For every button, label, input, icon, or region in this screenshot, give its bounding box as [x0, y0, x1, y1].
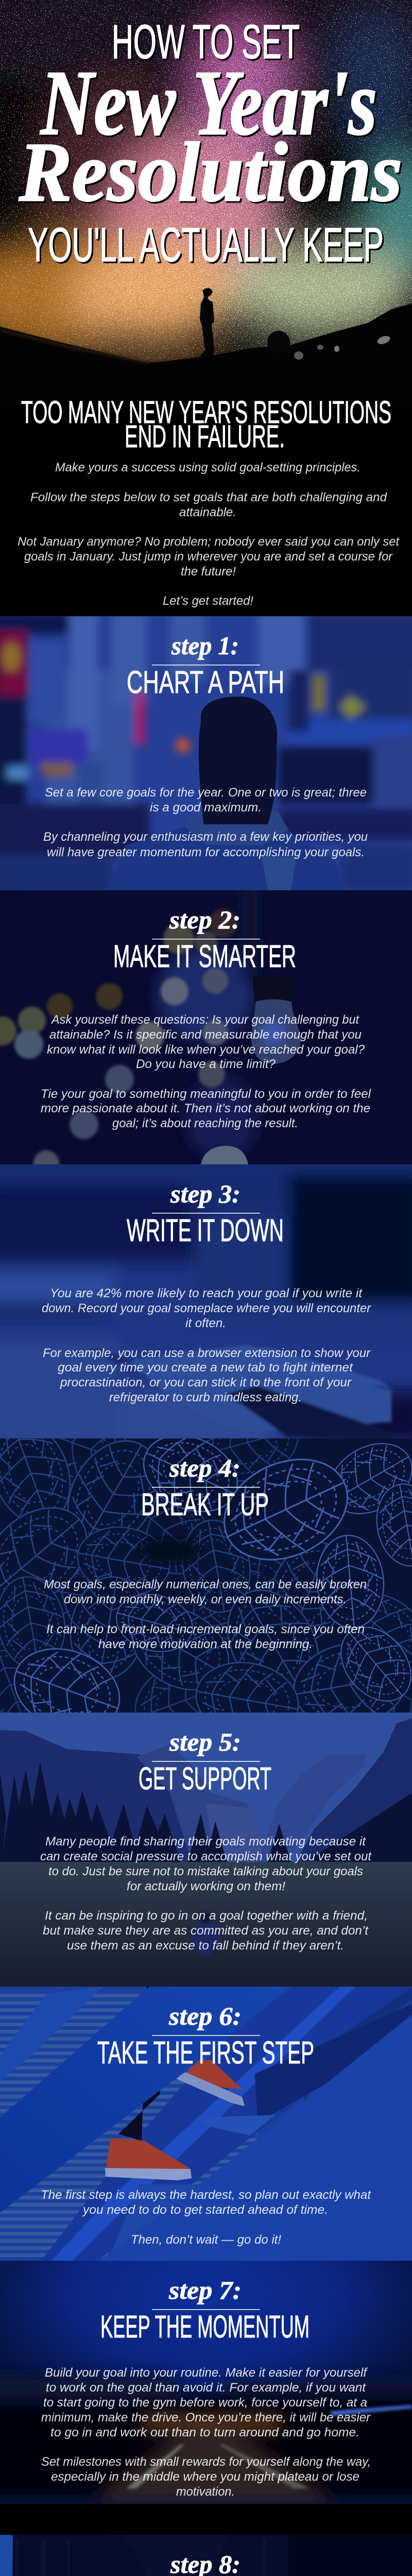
text block: for actually working on them! — [127, 1879, 285, 1893]
text block: By channeling your enthusiasm into a few key priorities, you — [43, 830, 368, 844]
background: blurred city street with man — [0, 613, 412, 902]
text block: intro: Not January anymore? No problem; nobody ever said you can only set — [18, 535, 400, 549]
text block: intro: attainable. — [179, 505, 236, 519]
background: notebook, pen and mug — [0, 1154, 412, 1448]
text block — [44, 1578, 367, 1651]
background: mountain valley meadow — [0, 1713, 412, 1987]
heading: intro: END IN FAILURE. — [125, 419, 285, 454]
text block — [41, 2188, 371, 2247]
text block: more passionate about it. Then it’s not about working on the — [41, 1101, 370, 1115]
text block: Build your goal into your routine. Make it easier for yourself — [45, 2366, 368, 2380]
background: jumping runner on road — [0, 2535, 412, 2576]
step label: step 6: — [168, 2002, 242, 2030]
text block — [42, 1286, 371, 1404]
panel: step 7 keep the momentum — [0, 2261, 412, 2535]
text block: Then, don’t wait — go do it! — [131, 2233, 281, 2247]
text block: goal every time you create a new tab to fight internet — [58, 1361, 353, 1375]
heading: BREAK IT UP — [141, 1487, 269, 1522]
step label: step 3: — [170, 1179, 241, 1208]
text block: to go in and work out than to turn around and go home. — [50, 2426, 359, 2439]
text block: attainable? Is it specific and measurable enough that you — [49, 1028, 362, 1042]
title: HOW TO SET — [112, 15, 300, 69]
background: dark hillside — [0, 303, 412, 396]
text block: have more motivation at the beginning. — [98, 1637, 313, 1651]
heading: MAKE IT SMARTER — [113, 939, 296, 974]
panel: step 8 reach your goal — [0, 2535, 412, 2576]
text block: to work on the goal than avoid it. For example, if you want — [46, 2381, 366, 2395]
text block: especially in the middle where you might plateau or lose — [51, 2470, 359, 2484]
text block: The first step is always the hardest, so plan out exactly what — [41, 2188, 371, 2202]
text block: Set a few core goals for the year. One or two is great; three — [45, 786, 367, 800]
panel: step 6 take the first step — [0, 1987, 412, 2261]
text block: use them as an excuse to fall behind if they aren’t. — [67, 1939, 344, 1953]
heading: CHART A PATH — [127, 665, 284, 700]
text block: It can help to front-load incremental goals, since you often — [46, 1622, 365, 1636]
text block: to start going to the gym before work, force yourself to, at a — [43, 2396, 367, 2410]
text block: but make sure they are as committed as you are, and don’t — [43, 1924, 369, 1938]
text block — [41, 2366, 371, 2499]
panel: step 5 get support — [0, 1713, 412, 1987]
text block: For example, you can use a browser extension to show your — [43, 1346, 371, 1360]
step label: step 2: — [169, 905, 241, 934]
text block: Ask yourself these questions: Is your goal challenging but — [50, 1013, 359, 1027]
text block: down into monthly, weekly, or even daily increments. — [64, 1592, 347, 1606]
text block: refrigerator to curb mindless eating. — [109, 1391, 302, 1404]
text block: it often. — [185, 1316, 226, 1330]
panel: step 3 write it down — [0, 1154, 412, 1448]
panel: step 2 make it smarter — [0, 890, 412, 1176]
background: night sky with milky way — [0, 0, 412, 363]
text block: It can be inspiring to go in on a goal together with a friend, — [45, 1909, 368, 1923]
text block: Do you have a time limit? — [136, 1057, 276, 1071]
text block: Tie your goal to something meaningful to you in order to feel — [41, 1087, 371, 1101]
heading: intro — [21, 395, 391, 454]
background: feet climbing blue stairs — [0, 1987, 412, 2261]
text block: procrastination, or you can stick it to the front of your — [60, 1376, 352, 1389]
text block: motivation. — [176, 2485, 235, 2499]
text block: Many people find sharing their goals motivating because it — [45, 1835, 366, 1849]
text block: intro: goals in January. Just jump in wherever you are and set a course for — [24, 550, 393, 564]
step label: step 1: — [171, 631, 239, 660]
text block: minimum, make the drive. Once you’re there, it will be easier — [41, 2411, 371, 2425]
text block: intro: Let’s get started! — [163, 594, 253, 608]
text block — [41, 1013, 371, 1130]
step label: step 7: — [168, 2276, 242, 2304]
background: motion-blurred road at dusk — [0, 2261, 412, 2535]
text block — [40, 1835, 372, 1953]
text block: will have greater momentum for accomplishing your goals. — [47, 845, 365, 859]
text block: Set milestones with small rewards for yourself along the way, — [41, 2455, 371, 2469]
background: veined leaves — [0, 1438, 412, 1713]
icon: person silhouette — [200, 288, 214, 357]
text block: can create social pressure to accomplish what you’ve set out — [40, 1850, 372, 1863]
heading: GET SUPPORT — [139, 1761, 271, 1796]
text block — [43, 786, 368, 859]
panel: step 1 chart a path — [0, 613, 412, 902]
text block: intro: Follow the steps below to set goals that are both challenging and — [30, 490, 387, 504]
text block: goal; it’s about reaching the result. — [112, 1116, 298, 1130]
text block: intro: Make yours a success using solid goal-setting principles. — [55, 461, 360, 474]
text block: is a good maximum. — [150, 801, 262, 815]
text block: to do. Just be sure not to mistake talking about your goals — [48, 1865, 363, 1878]
step label: step 4: — [169, 1453, 241, 1482]
text block: You are 42% more likely to reach your goal if you write it — [50, 1286, 363, 1300]
text block: you need to do to get started ahead of time. — [82, 2203, 328, 2217]
heading: WRITE IT DOWN — [127, 1213, 284, 1248]
title — [19, 15, 402, 272]
text block: intro — [18, 461, 400, 608]
text block: know what it will look like when you’ve reached your goal? — [47, 1043, 365, 1057]
text block: Most goals, especially numerical ones, can be easily broken — [44, 1578, 367, 1591]
background: light bulb with bokeh — [0, 890, 412, 1176]
panel: step 4 break it up — [0, 1438, 412, 1713]
step label: step 5: — [169, 1727, 241, 1756]
text block: intro: the future! — [181, 565, 236, 579]
panel: hero starry sky and intro — [0, 0, 412, 365]
text block: down. Record your goal someplace where you will encounter — [42, 1301, 371, 1315]
